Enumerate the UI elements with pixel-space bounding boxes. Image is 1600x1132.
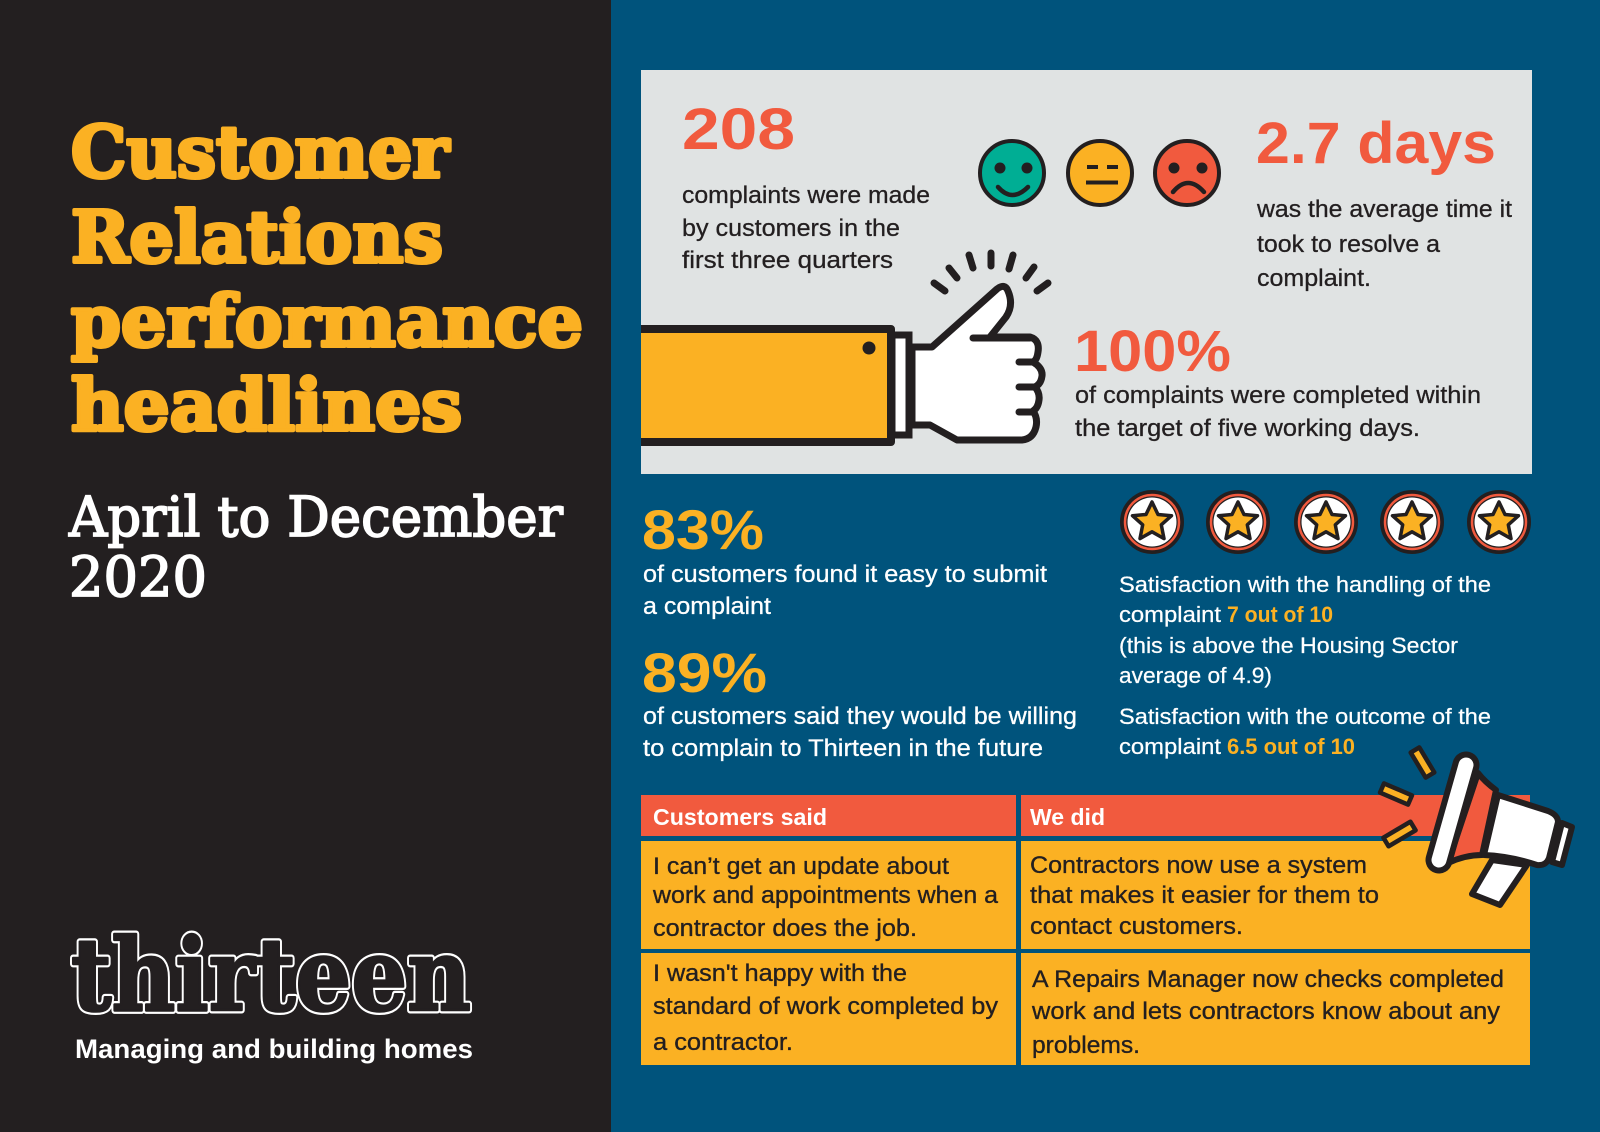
text: satisfaction with outcome: 6.5 out of 10 <box>1227 734 1355 759</box>
row 1: customer comment: work and appointments when a <box>652 882 999 909</box>
row 2: action taken: work and lets contractors know about any <box>1031 998 1500 1025</box>
row 2: action taken: problems. <box>1032 1032 1140 1059</box>
panel: complaints summary <box>641 70 1532 474</box>
nozzle <box>1552 823 1572 865</box>
title <box>71 110 583 447</box>
sound marks <box>1411 747 1434 778</box>
subtitle: date range: April to December <box>68 485 564 549</box>
stat: 83 percent: of customers found it easy to submit <box>643 561 1047 588</box>
stat: 89 percent: to complain to Thirteen in the future <box>643 735 1043 762</box>
title: performance <box>71 279 583 363</box>
row 1: action taken: Contractors now use a system <box>1030 852 1367 879</box>
text: satisfaction with outcome: complaint <box>1119 734 1222 759</box>
stat: 100 percent: the target of five working days. <box>1075 415 1420 442</box>
stat: 2.7 days: was the average time it <box>1256 196 1512 223</box>
stat: 100 percent: of complaints were completed within <box>1075 382 1481 409</box>
stat: 100 percent <box>1074 319 1481 442</box>
stat: 2.7 days <box>1256 111 1512 292</box>
stat: 89 percent: 89% <box>642 641 767 704</box>
stat: 2.7 days: complaint. <box>1257 265 1371 292</box>
stat: 83 percent <box>642 498 1047 620</box>
row 1: customer comment: contractor does the job. <box>653 915 917 942</box>
stat: 208 complaints: complaints were made <box>682 182 930 209</box>
cuff <box>892 335 909 435</box>
row 1: action taken <box>1021 841 1530 949</box>
row 2: customer comment <box>641 953 1016 1065</box>
panel: left dark column <box>0 0 611 1132</box>
stat: 100 percent: 100% <box>1074 319 1231 384</box>
stat: 89 percent: of customers said they would be willing <box>643 703 1077 730</box>
stat: 89 percent <box>642 641 1077 762</box>
text: satisfaction with handling <box>1119 572 1491 688</box>
header: customers said <box>641 795 1016 836</box>
logo: thirteen: Managing and building homes <box>75 1034 473 1064</box>
stat: 2.7 days: 2.7 days <box>1256 111 1496 176</box>
row 2: customer comment: standard of work completed by <box>653 993 998 1020</box>
logo: thirteen: thirteen <box>71 916 471 1034</box>
header: we did <box>1021 795 1530 836</box>
stat: 208 complaints: 208 <box>682 97 795 162</box>
sparkle marks <box>934 253 1048 291</box>
sleeve <box>641 329 891 442</box>
row 2: action taken <box>1021 953 1530 1065</box>
stat: 208 complaints <box>682 97 930 274</box>
title: Customer <box>71 110 451 194</box>
icon: sad face <box>1155 141 1219 205</box>
text: satisfaction with handling: 7 out of 10 <box>1227 602 1333 627</box>
icon: megaphone <box>1380 747 1572 905</box>
stat: 83 percent: 83% <box>642 498 764 561</box>
row 1: action taken: that makes it easier for them to <box>1030 882 1379 909</box>
text: satisfaction with handling: complaint <box>1119 602 1222 627</box>
header: customers said: Customers said <box>653 804 827 830</box>
rim <box>1439 765 1466 860</box>
subtitle: date range <box>68 485 564 609</box>
text: satisfaction with handling: (this is above the Housing Sector <box>1119 633 1459 658</box>
row 1: customer comment <box>641 841 1016 949</box>
stat: 2.7 days: took to resolve a <box>1257 231 1441 258</box>
red cone <box>1448 773 1496 863</box>
icon: thumbs up arm <box>641 253 1048 442</box>
text: satisfaction with handling: average of 4.9) <box>1119 663 1272 688</box>
row 1: customer comment: I can’t get an update about <box>653 853 949 880</box>
row 2: action taken: A Repairs Manager now checks completed <box>1032 966 1504 993</box>
text: satisfaction with outcome <box>1119 704 1491 759</box>
title: Relations <box>71 195 443 279</box>
handle <box>1472 860 1527 905</box>
text: satisfaction with outcome: Satisfaction with the outcome of the <box>1119 704 1491 729</box>
stat: 83 percent: a complaint <box>643 593 771 620</box>
icon: neutral face <box>1068 141 1132 205</box>
subtitle: date range: 2020 <box>69 545 207 609</box>
table: customers said, we did <box>641 795 1530 1065</box>
row 2: customer comment: I wasn't happy with the <box>653 960 907 987</box>
hand <box>912 286 1042 440</box>
icon: five star badges <box>1122 492 1530 552</box>
row 1: action taken: contact customers. <box>1030 913 1243 940</box>
stat: 208 complaints: by customers in the <box>682 215 900 242</box>
row 2: customer comment: a contractor. <box>653 1029 793 1056</box>
text: satisfaction with handling: Satisfaction with the handling of the <box>1119 572 1491 597</box>
title: headlines <box>71 363 462 447</box>
icon: happy face <box>980 141 1044 205</box>
stat: 208 complaints: first three quarters <box>682 247 893 274</box>
white horn <box>1484 795 1558 865</box>
header: we did: We did <box>1030 804 1105 830</box>
logo: thirteen: thirteen <box>71 916 471 1034</box>
